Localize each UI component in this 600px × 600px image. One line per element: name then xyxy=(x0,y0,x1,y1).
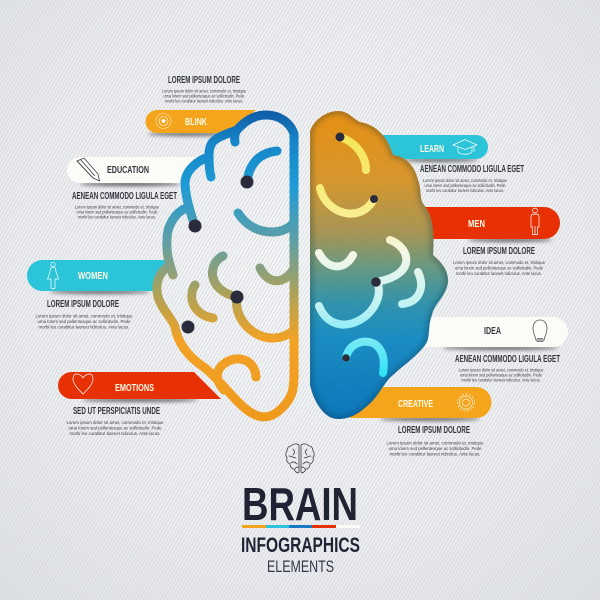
text block: emotions: morbi leo curabitur laoreet ridiculus. Ante lacus. xyxy=(70,431,160,437)
text block: men: LOREM IPSUM DOLORE xyxy=(463,246,535,257)
icon: graduation cap xyxy=(453,140,477,154)
text block: emotions: urna lorem sed pellentesque ac sollicitudin. Pede xyxy=(68,426,162,432)
text block: idea: morbi leo curabitur laoreet ridiculus. Ante lacus. xyxy=(462,378,540,384)
icon: heart xyxy=(73,374,93,394)
text block: blink: urna lorem sed pellentesque ac sollicitudin. Pede xyxy=(164,94,245,100)
text block: education: urna lorem sed pellentesque ac sollicitudin. Pede xyxy=(76,210,158,216)
left brain dots xyxy=(182,176,254,334)
text block: women: morbi leo curabitur laoreet ridiculus. Ante lacus. xyxy=(38,324,130,330)
text block: idea: urna lorem sed pellentesque ac sollicitudin. Pede xyxy=(460,372,542,378)
text block: men: urna lorem sed pellentesque ac sollicitudin. Pede xyxy=(455,266,543,272)
tab: idea: IDEA xyxy=(484,325,501,337)
text block: women: urna lorem sed pellentesque ac sollicitudin. Pede xyxy=(38,319,131,325)
tab: idea xyxy=(425,317,568,350)
text block: education xyxy=(72,191,177,220)
icon: man xyxy=(531,208,539,234)
text block: creative: urna lorem sed pellentesque ac sollicitudin. Pede xyxy=(388,446,482,452)
text block: creative xyxy=(386,425,484,458)
icon: target xyxy=(156,114,171,128)
tab: men xyxy=(415,207,560,242)
text block: women: Lorem ipsum dolor sit amet, commodo et, tristique xyxy=(36,314,133,320)
tab: creative: CREATIVE xyxy=(398,398,433,410)
tab: men: MEN xyxy=(468,218,485,230)
text block: idea xyxy=(455,354,560,384)
text block: learn: AENEAN COMMODO LIGULA EGET xyxy=(420,164,524,175)
right brain arcs xyxy=(319,137,421,373)
inner arcs xyxy=(192,151,294,338)
text block: emotions: SED UT PERSPICIATIS UNDE xyxy=(73,406,160,417)
text block: blink: LOREM IPSUM DOLORE xyxy=(168,75,240,86)
text block: blink: Lorem ipsum dolor sit amet, commodo et, tristique xyxy=(162,88,246,94)
text block: learn: morbi leo curabitur laoreet ridiculus. Ante lacus. xyxy=(426,188,504,194)
tab: blink: BLINK xyxy=(185,116,207,128)
right brain xyxy=(310,111,448,419)
text block: blink: morbi leo curabitur laoreet ridiculus. Ante lacus. xyxy=(165,98,243,104)
text block: men xyxy=(453,246,545,277)
title: BRAIN xyxy=(242,478,358,530)
text block: women xyxy=(36,299,133,330)
text block: blink xyxy=(162,75,246,104)
text block: idea: Lorem ipsum dolor sit amet, commodo et, tristique xyxy=(458,368,544,374)
right brain dots xyxy=(336,132,381,362)
tab: education xyxy=(67,157,205,186)
text block: learn: Lorem ipsum dolor sit amet, commodo et, tristique xyxy=(423,178,507,184)
text block: creative: LOREM IPSUM DOLORE xyxy=(398,425,470,436)
text block: education: AENEAN COMMODO LIGULA EGET xyxy=(72,191,177,202)
tab: women xyxy=(27,260,166,294)
tab: creative xyxy=(350,387,492,421)
text block: creative: morbi leo curabitur laoreet ridiculus. Ante lacus. xyxy=(390,452,480,458)
tab: learn xyxy=(380,135,488,162)
text block: learn: urna lorem sed pellentesque ac sollicitudin. Pede xyxy=(424,183,506,189)
icon: pencil xyxy=(77,158,100,181)
icon: gear xyxy=(458,394,474,411)
tab: learn: LEARN xyxy=(420,143,444,155)
text block: learn xyxy=(420,164,524,194)
text block: education: morbi leo curabitur laoreet ridiculus. Ante lacus. xyxy=(78,214,156,220)
text block: men: morbi leo curabitur laoreet ridiculus. Ante lacus. xyxy=(456,271,542,277)
tab: women: WOMEN xyxy=(78,270,108,282)
title xyxy=(241,478,360,576)
text block: women: LOREM IPSUM DOLORE xyxy=(47,299,119,310)
icon: small brain xyxy=(286,444,314,473)
tab: education: EDUCATION xyxy=(107,164,149,176)
text block: emotions xyxy=(66,406,164,437)
text block: men: Lorem ipsum dolor sit amet, commodo et, tristique xyxy=(453,260,545,266)
title: ELEMENTS xyxy=(267,557,334,576)
tab: emotions: EMOTIONS xyxy=(115,382,154,394)
title: INFOGRAPHICS xyxy=(241,534,360,557)
colour bar xyxy=(242,525,360,528)
icon: woman xyxy=(48,262,58,289)
text block: emotions: Lorem ipsum dolor sit amet, commodo et, tristique xyxy=(66,420,164,426)
tab: blink xyxy=(146,110,256,136)
icon: light bulb xyxy=(533,320,547,342)
text block: creative: Lorem ipsum dolor sit amet, commodo et, tristique xyxy=(386,440,484,446)
tab: emotions xyxy=(58,372,221,402)
left brain outline xyxy=(157,115,294,417)
text block: education: Lorem ipsum dolor sit amet, commodo et, tristique xyxy=(75,204,159,210)
